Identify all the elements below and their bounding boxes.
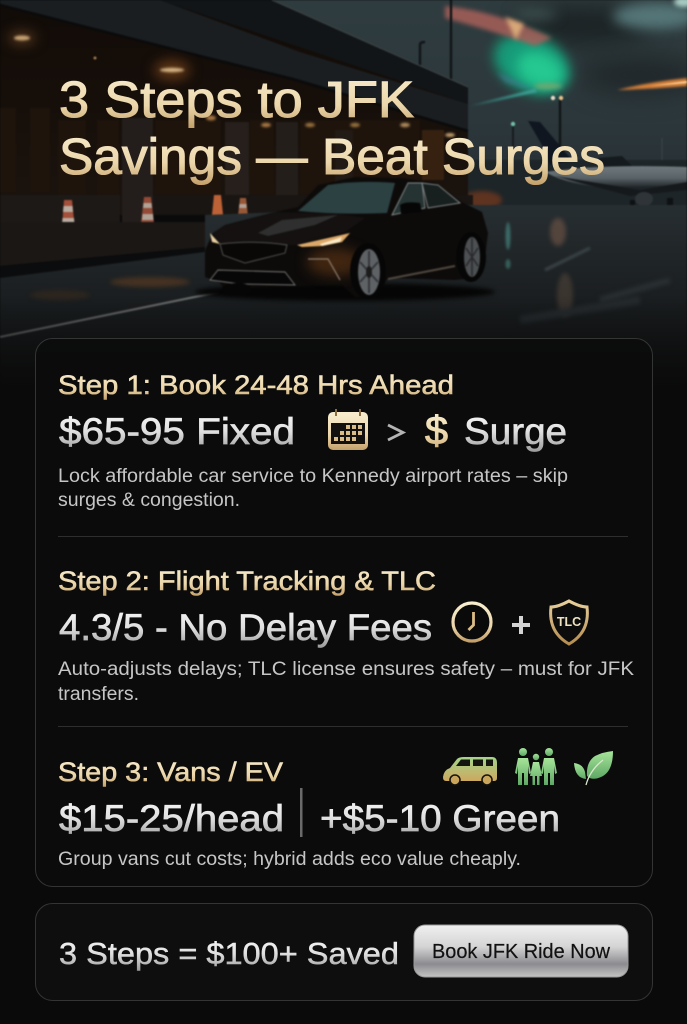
- step 1 description: surges & congestion.: [58, 490, 240, 511]
- step 1 description: [58, 466, 568, 511]
- step 2 heading: Step 2: Flight Tracking & TLC: [58, 566, 436, 596]
- step 3 description: Group vans cut costs; hybrid adds eco value cheaply.: [58, 849, 521, 870]
- step 1 heading: Step 1: Book 24-48 Hrs Ahead: [58, 370, 454, 400]
- step 3 price per head: $15-25/head: [59, 798, 284, 839]
- columns: [122, 118, 153, 225]
- step 1 fixed price: $65-95 Fixed: [59, 411, 295, 452]
- light poles: [420, 0, 662, 160]
- storm clouds: [510, 0, 687, 93]
- rainbow lens flare: [445, 6, 580, 106]
- bottom fade into page: [0, 296, 687, 392]
- hero photo: airport scene with car: [0, 0, 687, 431]
- step 2 description: Auto-adjusts delays; TLC license ensures safety – must for JFK: [58, 659, 634, 680]
- side windows: [392, 183, 425, 215]
- step 2 description: transfers.: [58, 684, 139, 705]
- step 2 description: [58, 659, 634, 705]
- step 2 rating: 4.3/5 - No Delay Fees: [59, 607, 432, 648]
- icon: leaf: [574, 751, 613, 785]
- step 2: [58, 566, 634, 705]
- button: book ride: [414, 925, 628, 977]
- deck band: [0, 0, 468, 130]
- step 3: [58, 748, 613, 870]
- terminal building: [0, 0, 473, 225]
- traffic cones: [61, 195, 248, 239]
- grille: [220, 242, 287, 263]
- body: [205, 177, 488, 298]
- hood reflection: [258, 215, 338, 236]
- sky: [0, 0, 687, 215]
- summary text: 3 Steps = $100+ Saved: [59, 936, 399, 971]
- icon: dollar: $: [425, 409, 448, 453]
- icon: clock: [453, 603, 491, 641]
- step 1: [58, 370, 568, 511]
- orange light streak: [617, 78, 687, 90]
- icon: family: [515, 748, 557, 785]
- wheels: [350, 243, 386, 299]
- headlights: [297, 233, 350, 247]
- orange vehicle behind car: [462, 191, 502, 209]
- button: book ride: Book JFK Ride Now: [432, 940, 610, 963]
- icon: van: [443, 757, 497, 785]
- aircraft: [528, 121, 687, 206]
- car: [195, 177, 495, 301]
- plus sign: [512, 616, 530, 634]
- title: [59, 71, 605, 185]
- icon: TLC shield: [551, 601, 587, 644]
- ceiling lights: [8, 31, 455, 137]
- icon: TLC shield: TLC: [557, 615, 581, 629]
- backdrop scenery: [0, 0, 687, 396]
- step 3 heading: Step 3: Vans / EV: [58, 757, 283, 787]
- wet tarmac: [0, 205, 687, 396]
- sidewalk and kerb: [0, 222, 205, 266]
- panel: summary call to action: [36, 904, 652, 1000]
- mirror: [400, 202, 422, 214]
- lower windows: [0, 108, 420, 194]
- greater-than sign: [388, 425, 403, 440]
- side sill: [388, 266, 455, 279]
- bumper chrome: [308, 259, 340, 280]
- title: 3 Steps to JFK: [59, 71, 414, 128]
- distant treeline: [440, 160, 687, 206]
- warm glow near headlight: [307, 248, 363, 276]
- windshield: [298, 182, 395, 214]
- hood: [213, 212, 365, 245]
- step 1 description: Lock affordable car service to Kennedy airport rates – skip: [58, 466, 568, 487]
- panel: three steps: [36, 338, 652, 886]
- title: Savings — Beat Surges: [59, 128, 605, 185]
- upper railing: [160, 0, 468, 104]
- step 3 green upcharge: +$5-10 Green: [320, 798, 560, 839]
- surge label: Surge: [464, 411, 567, 452]
- road line: [0, 292, 219, 337]
- wet reflections: [30, 218, 670, 320]
- icon: calendar: [328, 409, 368, 450]
- lower intake: [210, 270, 295, 285]
